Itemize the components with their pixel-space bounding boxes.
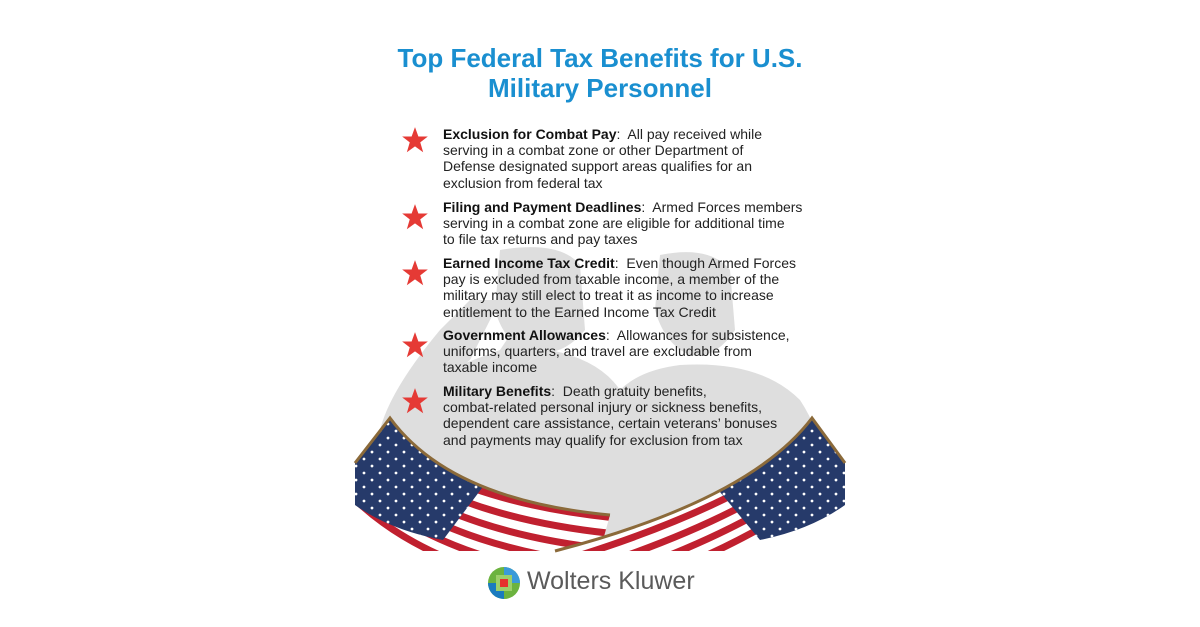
item 3: military may still elect to treat it as income to increase [443, 287, 774, 303]
item 4: Government Allowances: Allowances for subsistence, [443, 327, 790, 343]
item 1: Defense designated support areas qualifies for an [443, 158, 752, 174]
background silhouettes and flags [354, 247, 846, 552]
item 3 [443, 255, 796, 320]
item 1: Exclusion for Combat Pay: All pay received while [443, 126, 762, 142]
star 5 [402, 388, 428, 414]
item 3: pay is excluded from taxable income, a member of the [443, 271, 779, 287]
star 2 [402, 204, 428, 230]
item 5: and payments may qualify for exclusion from tax [443, 432, 743, 448]
item 1: serving in a combat zone or other Department of [443, 142, 743, 158]
item 4: taxable income [443, 359, 537, 375]
item 4: uniforms, quarters, and travel are excludable from [443, 343, 752, 359]
item 3: entitlement to the Earned Income Tax Credit [443, 304, 716, 320]
title: Top Federal Tax Benefits for U.S. [398, 43, 802, 73]
text: Wolters Kluwer: Wolters Kluwer [527, 567, 695, 595]
star 4 [402, 332, 428, 358]
item 1 [443, 126, 762, 191]
item 3: Earned Income Tax Credit: Even though Armed Forces [443, 255, 796, 271]
item 5 [443, 383, 777, 448]
silhouette: saluting soldiers [380, 247, 825, 550]
left flag [355, 420, 610, 551]
item 2: serving in a combat zone are eligible for additional time [443, 215, 785, 231]
item 5: combat-related personal injury or sickness benefits, [443, 399, 762, 415]
title [398, 43, 802, 103]
item 2 [443, 199, 802, 247]
item 5: dependent care assistance, certain veterans’ bonuses [443, 415, 777, 431]
icon: logo globe [488, 567, 520, 599]
logo [488, 567, 695, 599]
item 2: Filing and Payment Deadlines: Armed Forces members [443, 199, 802, 215]
item 5: Military Benefits: Death gratuity benefits, [443, 383, 707, 399]
item 4 [443, 327, 790, 375]
star 1 [402, 127, 428, 152]
star 3 [402, 260, 428, 286]
item 2: to file tax returns and pay taxes [443, 231, 638, 247]
title: Military Personnel [488, 73, 712, 103]
right flag [572, 420, 845, 551]
item 1: exclusion from federal tax [443, 175, 603, 191]
